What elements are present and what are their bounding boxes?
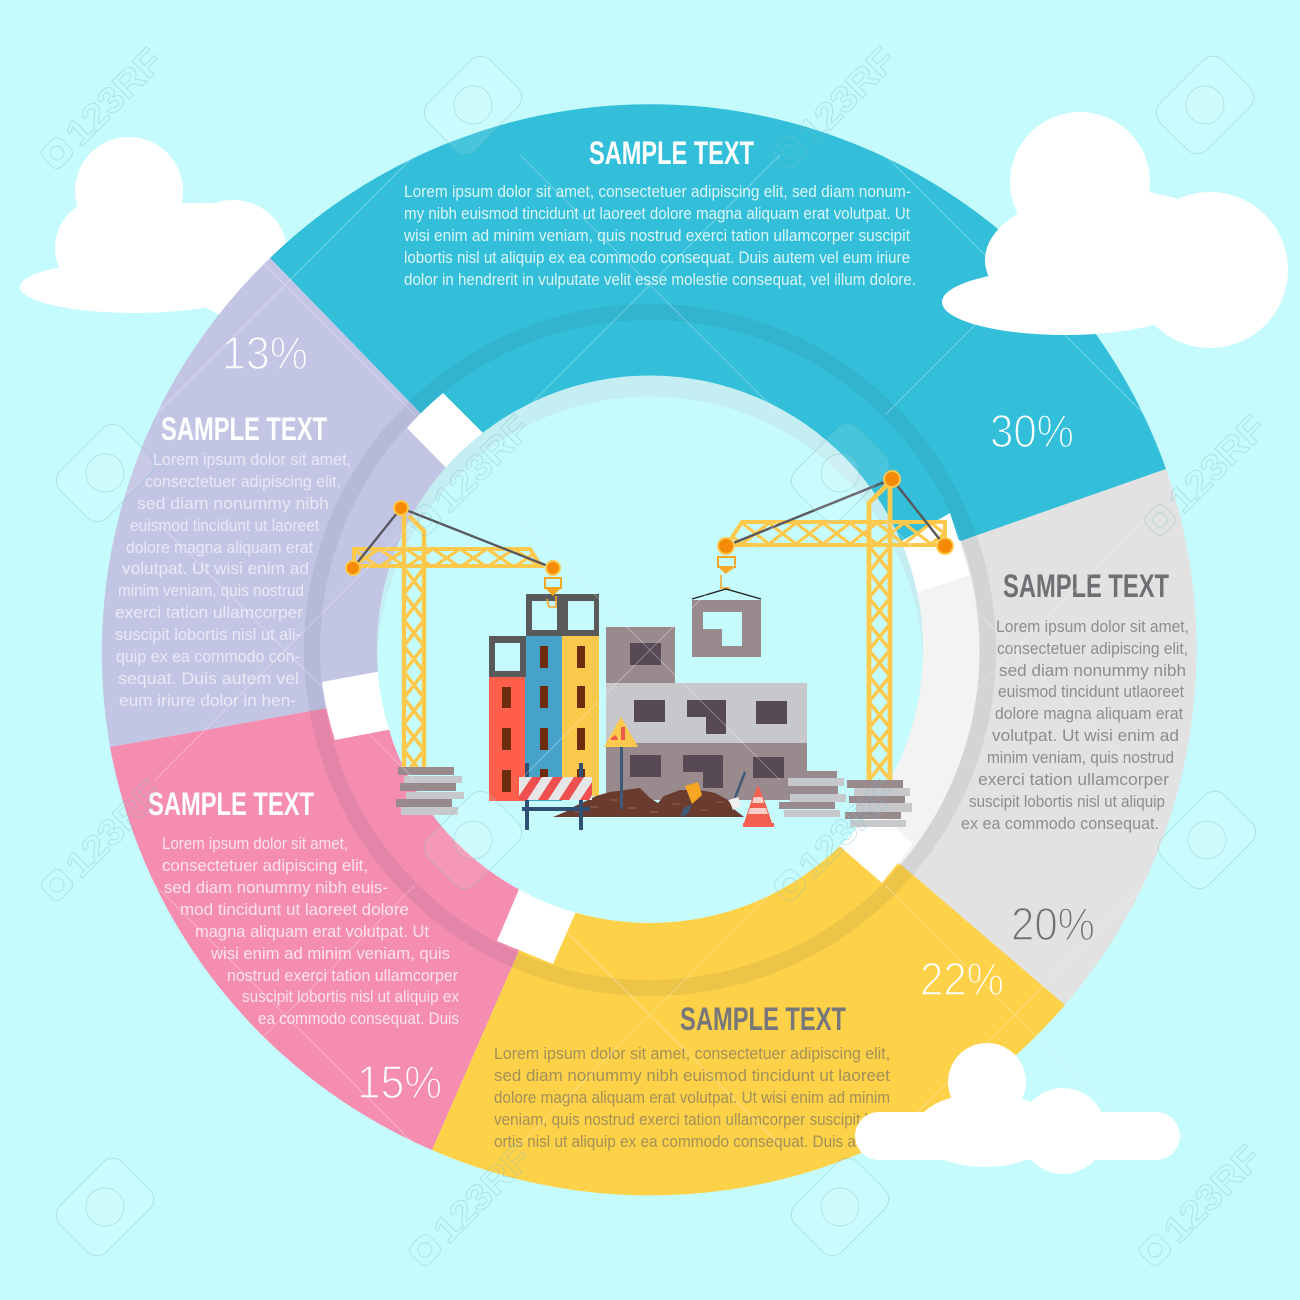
- heading: blue segment: SAMPLE TEXT: [589, 135, 754, 171]
- percent: 13%: 13%: [222, 327, 308, 379]
- text block: pink segment: magna aliquam erat volutpat. Ut: [195, 922, 429, 941]
- heading: lavender segment: SAMPLE TEXT: [161, 411, 327, 447]
- percent: 22%: 22%: [920, 953, 1004, 1005]
- text block: yellow segment: dolore magna aliquam erat volutpat. Ut wisi enim ad minim: [494, 1088, 890, 1107]
- panel: 22% yellow segment: [432, 650, 1065, 1195]
- crescent highlight: [377, 376, 923, 659]
- text block: lavender segment: minim veniam, quis nostrud: [118, 581, 304, 600]
- text block: yellow segment: ortis nisl ut aliquip ex ea commodo consequat. Duis autem: [494, 1132, 890, 1151]
- building: grey concrete block: [606, 627, 807, 800]
- watermark pattern: 123RF: [57, 772, 171, 886]
- traffic cone: [743, 785, 774, 827]
- percent: 20%: 20%: [1011, 898, 1095, 950]
- text block: lavender segment: eum iriure dolor in hen-: [119, 691, 296, 710]
- percent: 15%: 15%: [357, 1056, 442, 1108]
- right crane: [718, 471, 953, 780]
- text block: blue segment: [403, 182, 916, 289]
- text block: grey segment: euismod tincidunt utlaoreet: [998, 682, 1184, 701]
- text block: blue segment: my nibh euismod tincidunt ut laoreet dolore magna aliquam erat volutpat. Ut: [404, 204, 910, 223]
- cloud: top left: [20, 137, 288, 325]
- lighter inner ring on grey segment: [650, 540, 979, 865]
- text block: lavender segment: suscipit lobortis nisl ut ali-: [115, 625, 301, 644]
- warning sign: [604, 717, 638, 809]
- jackhammer tool: [680, 782, 702, 817]
- panel: 15% pink segment: [110, 650, 650, 1150]
- text block: pink segment: Lorem ipsum dolor sit amet,: [162, 834, 348, 853]
- panel: 30% blue segment: [270, 104, 1166, 650]
- text block: lavender segment: exerci tation ullamcorper: [115, 603, 303, 622]
- text block: pink segment: consectetuer adipiscing elit,: [162, 856, 368, 875]
- text block: grey segment: minim veniam, quis nostrud: [987, 748, 1174, 767]
- text block: lavender segment: sed diam nonummy nibh: [137, 494, 329, 513]
- text block: lavender segment: volutpat. Ut wisi enim ad: [122, 559, 309, 578]
- watermark pattern: 123RF: [57, 40, 171, 154]
- text block: lavender segment: [115, 450, 351, 710]
- text block: grey segment: suscipit lobortis nisl ut aliquip: [969, 792, 1165, 811]
- text block: blue segment: dolor in hendrerit in vulputate velit esse molestie consequat, vel illum dolore.: [404, 270, 916, 289]
- text block: pink segment: sed diam nonummy nibh euis-: [164, 878, 388, 897]
- cloud: top right: [942, 112, 1288, 348]
- construction illustration: [346, 471, 953, 830]
- text block: pink segment: nostrud exerci tation ullamcorper: [227, 966, 458, 985]
- heading: grey segment: SAMPLE TEXT: [1003, 568, 1169, 604]
- text block: yellow segment: sed diam nonummy nibh euismod tincidunt ut laoreet: [494, 1066, 890, 1085]
- dark ring band: [312, 312, 988, 988]
- text block: lavender segment: Lorem ipsum dolor sit amet,: [153, 450, 351, 469]
- text block: lavender segment: consectetuer adipiscing elit,: [145, 472, 341, 491]
- text block: pink segment: [162, 834, 459, 1028]
- text block: pink segment: ea commodo consequat. Duis: [258, 1009, 459, 1028]
- text block: lavender segment: dolore magna aliquam erat: [126, 538, 313, 557]
- dirt pile: [553, 788, 744, 817]
- left crane: [346, 501, 561, 770]
- text block: grey segment: volutpat. Ut wisi enim ad: [992, 726, 1179, 745]
- road barricade: [519, 763, 592, 830]
- text block: yellow segment: veniam, quis nostrud exerci tation ullamcorper suscipit lob-: [494, 1110, 890, 1129]
- white connector pieces: [322, 393, 970, 964]
- watermark pattern: 123RF: [1160, 407, 1274, 521]
- heading: yellow segment: SAMPLE TEXT: [680, 1001, 846, 1037]
- heading: pink segment: SAMPLE TEXT: [148, 786, 314, 822]
- text block: blue segment: lobortis nisl ut aliquip ex ea commodo consequat. Duis autem vel eum iriure: [404, 248, 910, 267]
- text block: blue segment: Lorem ipsum dolor sit amet, consectetuer adipiscing elit, sed diam nonum-: [404, 182, 911, 201]
- watermark pattern: 123RF: [1155, 1137, 1269, 1251]
- text block: yellow segment: Lorem ipsum dolor sit amet, consectetuer adipiscing elit,: [494, 1044, 890, 1063]
- text block: grey segment: dolore magna aliquam erat: [995, 704, 1183, 723]
- watermark pattern: 123RF: [425, 1137, 539, 1251]
- text block: blue segment: wisi enim ad minim veniam, quis nostrud exerci tation ullamcorper suscipit: [403, 226, 910, 245]
- text block: pink segment: wisi enim ad minim veniam, quis: [210, 944, 450, 963]
- centre circle: [377, 377, 923, 923]
- text block: grey segment: [961, 617, 1189, 833]
- text block: grey segment: consectetuer adipiscing elit,: [997, 639, 1188, 658]
- percent: 30%: 30%: [990, 405, 1074, 457]
- text block: grey segment: ex ea commodo consequat.: [961, 814, 1159, 833]
- brick stack: left: [396, 767, 464, 815]
- text block: grey segment: exerci tation ullamcorper: [978, 770, 1169, 789]
- hanging concrete panel: [692, 589, 761, 657]
- text block: grey segment: Lorem ipsum dolor sit amet,: [996, 617, 1189, 636]
- panel: 20% grey segment: [650, 469, 1197, 1005]
- watermark pattern: 123RF: [790, 772, 904, 886]
- watermark pattern: 123RF: [425, 407, 539, 521]
- shovel: [729, 772, 745, 810]
- text block: lavender segment: euismod tincidunt ut laoreet: [130, 516, 319, 535]
- text block: pink segment: mod tincidunt ut laoreet dolore: [180, 900, 409, 919]
- text block: lavender segment: quip ex ea commodo con-: [116, 647, 300, 666]
- brick stack: right: [845, 780, 912, 827]
- building: colored apartment block: [489, 594, 599, 801]
- brick stack: centre: [779, 771, 846, 817]
- watermark pattern: 123RF: [790, 39, 904, 153]
- text block: pink segment: suscipit lobortis nisl ut aliquip ex: [242, 987, 459, 1006]
- text block: grey segment: sed diam nonummy nibh: [999, 661, 1186, 680]
- panel: 13% lavender segment: [102, 258, 650, 747]
- text block: yellow segment: [494, 1044, 890, 1151]
- cloud: bottom right: [855, 1043, 1180, 1174]
- text block: lavender segment: sequat. Duis autem vel: [118, 669, 299, 688]
